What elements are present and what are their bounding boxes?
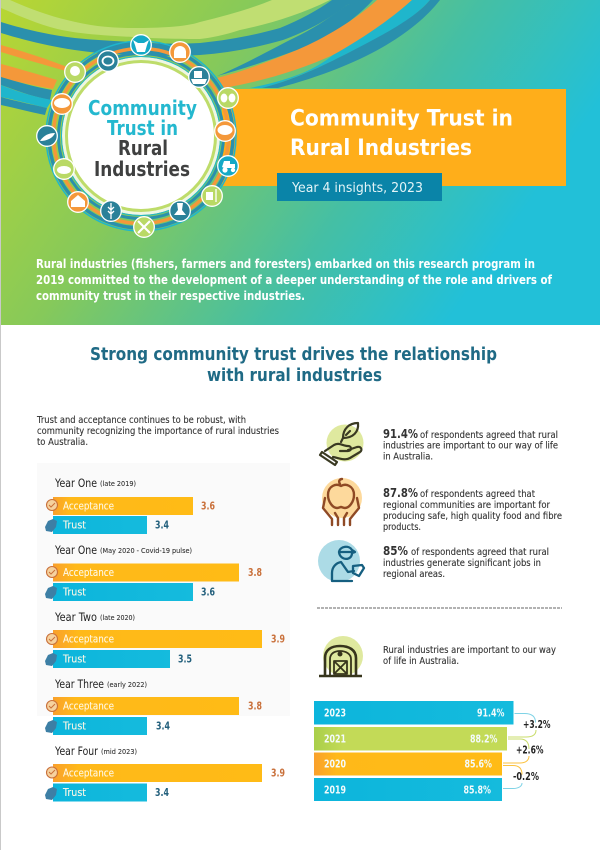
barn caption: Rural industries are important to our way — [383, 645, 556, 656]
year four group: 3.9 — [271, 766, 285, 780]
text: 91.4 percent: in Australia. — [383, 452, 433, 462]
logo text: Industries — [94, 157, 190, 181]
bar 2023: 2023 — [324, 706, 346, 720]
bar 2019 — [314, 778, 502, 801]
logo rings — [46, 41, 236, 231]
year four group: Trust — [62, 786, 87, 799]
year one 2020 group: Acceptance — [63, 566, 114, 579]
year four group: Acceptance — [63, 766, 114, 780]
text: 87.8 percent: products. — [383, 522, 421, 533]
icon: sheep — [54, 159, 74, 179]
icon: pig right — [215, 121, 235, 141]
change labels: -0.2% — [513, 770, 539, 783]
decorative swooshes — [1, 0, 440, 115]
text: 85 percent: regional areas. — [383, 569, 445, 580]
section heading — [90, 344, 497, 386]
bar 2020: 2020 — [324, 758, 346, 770]
text: 91.4 percent: industries are important to our way of life — [383, 440, 558, 452]
title: Rural Industries — [290, 136, 472, 161]
left intro text — [36, 415, 279, 448]
year two group: Year Two — [54, 610, 97, 624]
logo text: Community — [88, 96, 197, 120]
bar 2021 — [314, 727, 507, 750]
icon: wheat — [101, 201, 121, 221]
icon: farm — [170, 42, 190, 62]
left intro text: to Australia. — [37, 437, 88, 448]
logo text — [88, 96, 197, 181]
icon: cattle — [131, 35, 151, 55]
change labels: +2.6% — [516, 744, 544, 756]
icon: forester — [170, 201, 190, 221]
year one 2020 group: 3.8 — [248, 566, 262, 579]
icon: cotton — [65, 62, 85, 82]
icon: barn — [319, 636, 363, 676]
icon: worker with tablet — [318, 540, 364, 582]
icon: hands holding apple — [322, 478, 362, 525]
year four group: 3.4 — [155, 786, 169, 799]
year three group: Acceptance — [63, 700, 114, 712]
logo text: Rural — [118, 136, 168, 160]
year one 2020 group: Year One — [54, 543, 97, 557]
panel: chart background — [37, 463, 290, 716]
icon: cutlery — [134, 217, 154, 237]
year one 2020 group: 3.6 — [201, 586, 215, 598]
year two group: Acceptance — [63, 632, 114, 646]
year three group: 3.4 — [156, 720, 170, 732]
year one 2019 group: Year One — [54, 476, 97, 490]
icon: tractor — [218, 156, 238, 176]
year one 2019 group: (late 2019) — [100, 480, 136, 488]
year one 2019 group: Trust — [62, 518, 87, 532]
intro text — [36, 257, 553, 303]
left intro text: Trust and acceptance continues to be robust, with — [36, 415, 246, 426]
text: 87.8 percent: regional communities are important for — [383, 500, 550, 511]
section heading: Strong community trust drives the relationship — [90, 344, 497, 365]
bar chart: acceptance and trust — [45, 476, 285, 802]
icon: boat — [189, 67, 209, 87]
text: 85 percent — [383, 543, 549, 580]
bar 2020: 85.6% — [464, 758, 492, 770]
barn caption: of life in Australia. — [383, 656, 459, 667]
bar 2019: 85.8% — [464, 784, 491, 796]
title: Community Trust in — [290, 106, 513, 132]
year three group: Year Three — [54, 677, 104, 691]
year four group: (mid 2023) — [101, 748, 137, 756]
text: 85 percent: industries generate significant jobs in — [383, 558, 541, 569]
icon: milk and grain — [202, 186, 222, 206]
text: 91.4 percent: of respondents agreed that rural — [420, 430, 558, 441]
year two group: 3.9 — [271, 632, 285, 646]
bar 2023: 91.4% — [477, 706, 504, 720]
panel: orange title box — [222, 89, 566, 186]
barn caption — [383, 645, 556, 667]
icon: pig left — [52, 94, 72, 114]
bar 2021: 88.2% — [470, 732, 498, 746]
year one 2019 group: 3.6 — [201, 500, 215, 512]
text: 85 percent: of respondents agreed that rural — [411, 547, 549, 558]
bar 2021: 2021 — [324, 732, 346, 746]
title — [290, 106, 513, 161]
icon: wool — [98, 51, 118, 71]
text: 87.8 percent — [383, 485, 562, 533]
text: 91.4 percent — [383, 426, 558, 462]
icon: fish — [37, 126, 57, 146]
change labels: +3.2% — [523, 718, 550, 731]
year one 2019 group — [45, 476, 215, 534]
year four group: Year Four — [54, 744, 98, 758]
year comparison bars — [314, 701, 514, 801]
year one 2020 group — [45, 543, 262, 601]
year two group — [45, 610, 285, 668]
left intro text: community recognizing the importance of rural industries — [37, 426, 279, 437]
icon: house — [68, 192, 88, 212]
year four group — [45, 744, 285, 802]
year three group: Trust — [62, 720, 87, 732]
section heading: with rural industries — [207, 365, 382, 386]
year one 2019 group: Acceptance — [63, 500, 114, 512]
year three group: (early 2022) — [107, 681, 147, 689]
logo text: Trust in — [107, 116, 178, 140]
bar 2023 — [314, 701, 514, 724]
year two group: 3.5 — [178, 652, 192, 666]
icon: hand with leaf — [320, 423, 364, 465]
year one 2020 group: Trust — [62, 586, 87, 598]
change labels — [513, 718, 550, 783]
header background — [1, 0, 600, 325]
icons around logo — [37, 35, 238, 237]
change connectors — [503, 714, 536, 788]
text: 85 percent: 85% — [383, 543, 408, 558]
bar 2020 — [314, 752, 502, 776]
icon: eggs — [218, 88, 238, 108]
text: 87.8 percent: producing safe, high quality food and fibre — [383, 511, 562, 522]
year one 2019 group: 3.4 — [155, 518, 169, 532]
year one 2020 group: (May 2020 - Covid-19 pulse) — [100, 547, 192, 555]
year three group: 3.8 — [248, 700, 262, 712]
year two group: (late 2020) — [100, 614, 135, 622]
text: 87.8 percent: of respondents agreed that — [420, 489, 535, 500]
year three group — [45, 677, 262, 735]
text: 87.8 percent: 87.8% — [383, 485, 418, 500]
year two group: Trust — [62, 652, 87, 666]
intro text: community trust in their respective industries. — [36, 289, 305, 303]
subtitle box — [277, 173, 442, 201]
subtitle box: Year 4 insights, 2023 — [291, 180, 423, 196]
bar 2019: 2019 — [324, 784, 346, 796]
text: 91.4 percent: 91.4% — [383, 426, 418, 441]
